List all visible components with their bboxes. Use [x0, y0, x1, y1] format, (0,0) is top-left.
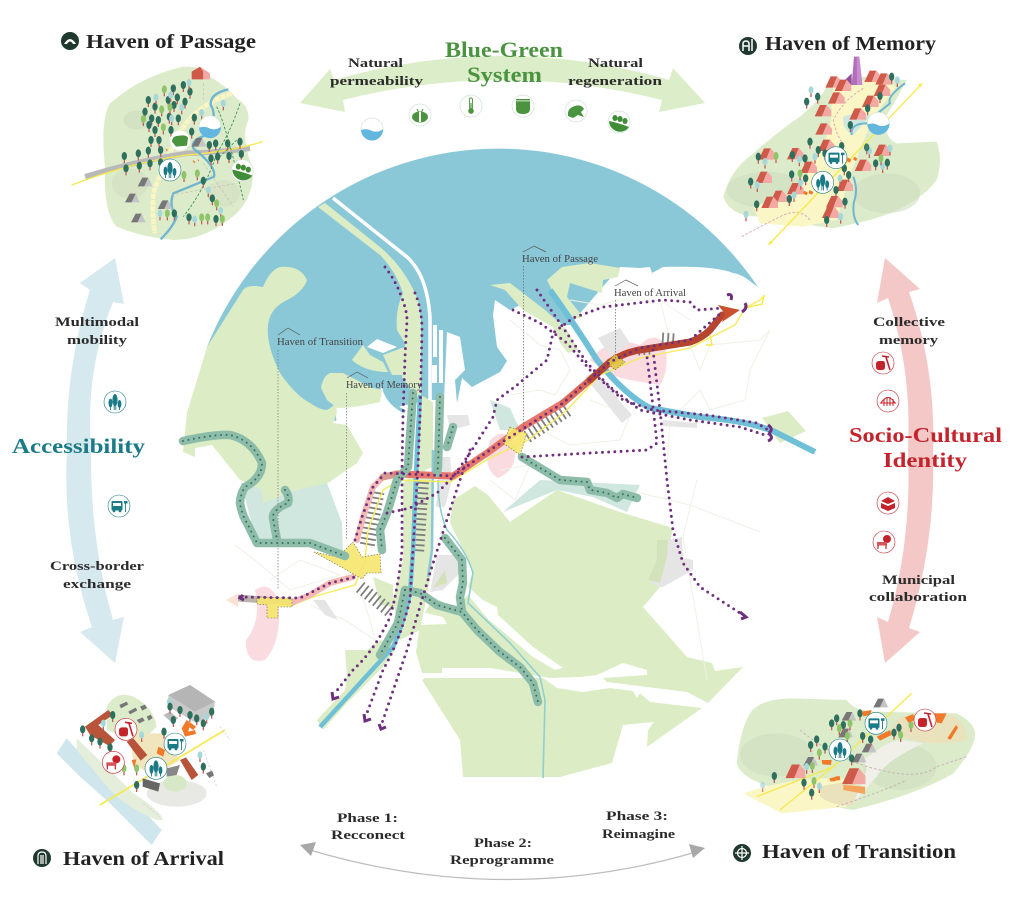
land: western white ground — [335, 383, 406, 480]
text: collective memory — [873, 314, 945, 347]
arrow: socio-cultural identity — [877, 258, 933, 663]
text: multimodal mobility: Multimodal — [55, 314, 139, 329]
yellow route — [293, 295, 765, 605]
grey plot green overlay — [433, 540, 668, 588]
title: Haven of Passage: Haven of Passage — [86, 31, 256, 53]
yellow plots — [257, 354, 625, 618]
map label: Haven of Memory: Haven of Memory — [346, 380, 422, 391]
text: municipal collaboration: collaboration — [869, 589, 968, 604]
text: collective memory: Collective — [873, 314, 945, 329]
map label: Haven of Arrival — [614, 280, 686, 360]
text: natural permeability — [330, 55, 424, 88]
green trails — [183, 393, 637, 702]
south greens — [416, 486, 743, 703]
text: phase 1 — [331, 810, 406, 842]
text: phase 3 — [602, 808, 675, 841]
arrow: accessibility — [66, 258, 124, 663]
accessibility corridor — [237, 315, 722, 602]
text: phase 3: Phase 3: — [606, 808, 668, 823]
panel: central map — [183, 149, 815, 778]
text: natural regeneration: regeneration — [568, 73, 663, 88]
text: natural permeability: Natural — [348, 55, 403, 70]
map label: Haven of Arrival: Haven of Arrival — [614, 288, 686, 299]
text: natural regeneration: Natural — [588, 55, 643, 70]
text: municipal collaboration: Municipal — [882, 572, 955, 587]
text: cross-border exchange — [50, 558, 144, 591]
text: phase 2: Reprogramme — [450, 852, 554, 867]
canal white stripe — [333, 198, 430, 400]
green patch on east river — [762, 411, 806, 443]
map label: Haven of Memory — [346, 372, 422, 540]
purple walking routes — [240, 267, 768, 723]
text: cross-border exchange: Cross-border — [50, 558, 144, 573]
icons: blue-green system — [361, 95, 630, 141]
text: multimodal mobility — [55, 314, 139, 347]
north-east green shores — [490, 263, 620, 353]
lagoon hatching — [360, 338, 677, 613]
heading: Blue-Green System — [445, 37, 563, 87]
text: cross-border exchange: exchange — [63, 576, 131, 591]
text: collective memory: memory — [879, 332, 939, 347]
green canal strip — [318, 203, 433, 640]
text: phase 2 — [450, 835, 554, 867]
title: Haven of Memory: Haven of Memory — [765, 33, 936, 55]
text: phase 1: Phase 1: — [337, 810, 398, 825]
docks — [432, 325, 443, 383]
route arrowhead — [718, 305, 740, 322]
arrow: phases — [300, 842, 705, 880]
text: phase 3: Reimagine — [602, 826, 675, 841]
map label: Haven of Passage: Haven of Passage — [522, 254, 599, 265]
text: natural regeneration — [568, 55, 663, 88]
heading: accessibility: Accessibility — [12, 434, 146, 458]
icons: socio-cultural — [872, 352, 899, 553]
heading: socio-cultural identity: Socio-Cultural — [849, 423, 1002, 447]
channel west — [383, 383, 405, 412]
text: phase 2: Phase 2: — [474, 835, 532, 850]
title: Haven of Arrival: Haven of Arrival — [63, 848, 224, 870]
arrow: blue-green system — [300, 56, 705, 112]
map label: Haven of Transition: Haven of Transition — [277, 337, 363, 348]
vignette: Haven of Passage — [72, 67, 263, 240]
map label: Haven of Passage — [522, 246, 599, 430]
heading: Blue-Green System: Blue-Green — [445, 37, 563, 62]
cycle route east end — [706, 296, 764, 345]
text: multimodal mobility: mobility — [67, 332, 128, 347]
text: municipal collaboration — [869, 572, 968, 604]
text: natural permeability: permeability — [330, 73, 424, 88]
map label: Haven of Transition — [277, 328, 363, 590]
grey plots — [313, 328, 697, 620]
sea — [190, 149, 758, 440]
inlet islands — [352, 345, 410, 375]
vignette: Haven of Transition — [737, 693, 975, 813]
road network — [235, 300, 770, 680]
icons: accessibility — [104, 391, 130, 517]
land: western green marsh — [183, 267, 363, 503]
heading: socio-cultural identity: Identity — [883, 448, 968, 472]
text: phase 1: Recconect — [331, 827, 406, 842]
route end chevrons — [240, 295, 772, 729]
heading: socio-cultural identity — [849, 423, 1002, 472]
teal meadow east — [490, 400, 640, 512]
pink districts — [246, 338, 667, 661]
heading: Blue-Green System: System — [467, 62, 542, 87]
marsh lens — [321, 373, 382, 408]
vignette: Haven of Arrival — [57, 685, 230, 845]
vignette: Haven of Memory — [723, 57, 940, 245]
blue river channels — [550, 290, 815, 452]
title: Haven of Transition: Haven of Transition — [762, 841, 956, 863]
teal meadow west — [241, 483, 343, 553]
